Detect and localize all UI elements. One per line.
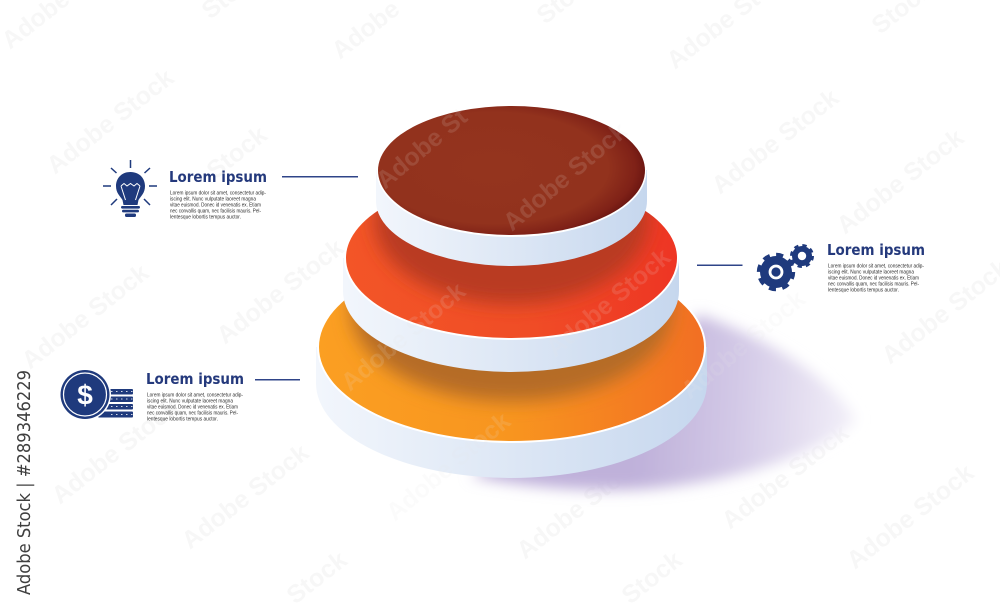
leader line [697, 264, 742, 266]
watermark: Adobe Stock [176, 439, 314, 555]
watermark: Adobe Stock [16, 259, 154, 375]
text block: nec convallis quam, nec facilisis mauris. Pel- [147, 410, 238, 416]
watermark over tiers [336, 102, 811, 527]
watermark: Adobe Stock [841, 459, 979, 575]
leader line [282, 176, 358, 178]
watermark: Stock [616, 546, 687, 610]
tier side: middle [343, 258, 679, 372]
text block [828, 264, 924, 294]
tier side: top [376, 170, 647, 266]
icon: coins: $ [77, 380, 93, 410]
text block: lentesque lobortis tempus auctor. [828, 288, 899, 294]
text block: vitae euismod. Donec id venenatis ex. Etiam [170, 202, 262, 208]
watermark over tiers: Adobe Stock [676, 285, 811, 405]
watermark over tiers: Adobe Stock [541, 243, 676, 363]
contact shadow: bottom [342, 300, 680, 411]
watermark: Adobe Stock [46, 394, 184, 510]
callout: bottom tier [59, 368, 300, 422]
tier surface: middle [346, 178, 677, 338]
watermark: Stock [281, 546, 352, 610]
tier rim: middle [344, 176, 679, 340]
tier surface: bottom [319, 253, 704, 441]
stock id label: Adobe Stock | #289346229 [14, 370, 35, 595]
tier side: bottom [316, 347, 707, 478]
heading: Lorem ipsum [827, 241, 925, 259]
text block: Lorem ipsum dolor sit amet, consectetur adip- [147, 392, 243, 398]
tier: top brown [376, 105, 647, 266]
watermark: Adobe Stock [211, 234, 349, 350]
callout: middle tier [697, 241, 925, 294]
text block [170, 190, 266, 220]
watermark: Adobe Stock [706, 84, 844, 200]
icon: gears [759, 246, 812, 289]
tier: middle red [343, 210, 679, 372]
tier rim: bottom [317, 251, 706, 443]
tier rim: top [376, 105, 646, 237]
watermark: Adobe Stock [511, 449, 649, 565]
tier: bottom orange [316, 300, 707, 478]
text block: lentesque lobortis tempus auctor. [147, 416, 218, 422]
text block: nec convallis quam, nec facilisis mauris. Pel- [828, 282, 919, 288]
watermark: Adobe Stock [716, 419, 854, 535]
watermark: Adobe Stock [41, 64, 179, 180]
watermark: Stock [201, 121, 272, 185]
text block: vitae euismod. Donec id venenatis ex. Etiam [828, 276, 920, 282]
watermark over tiers: Adobe Stock [336, 277, 471, 397]
icon: light bulb [103, 160, 157, 217]
heading: Lorem ipsum [146, 370, 244, 388]
callout: top tier [103, 160, 358, 220]
text block: Lorem ipsum dolor sit amet, consectetur adip- [170, 190, 266, 196]
contact shadow: middle [366, 211, 657, 313]
text block: nec convallis quam, nec facilisis mauris. Pel- [170, 208, 261, 214]
watermark: Adobe Stock [831, 124, 969, 240]
text block: iscing elit. Nunc vulputate laoreet magna [828, 270, 914, 276]
heading: Lorem ipsum [169, 168, 267, 186]
text block: Lorem ipsum dolor sit amet, consectetur adip- [828, 264, 924, 270]
watermark over tiers: Adobe Stock [381, 407, 516, 527]
text block: iscing elit. Nunc vulputate laoreet magna [147, 398, 233, 404]
leader line [255, 379, 300, 380]
tier surface: top [378, 106, 645, 235]
watermark over tiers: Adobe St [371, 102, 473, 195]
drop shadow [470, 314, 856, 490]
text block: iscing elit. Nunc vulputate laoreet magna [170, 196, 256, 202]
icon: coins [59, 368, 133, 420]
watermark over tiers: Adobe Stock [498, 117, 633, 237]
text block: lentesque lobortis tempus auctor. [170, 214, 241, 220]
text block [147, 392, 243, 422]
text block: vitae euismod. Donec id venenatis ex. Etiam [147, 404, 239, 410]
